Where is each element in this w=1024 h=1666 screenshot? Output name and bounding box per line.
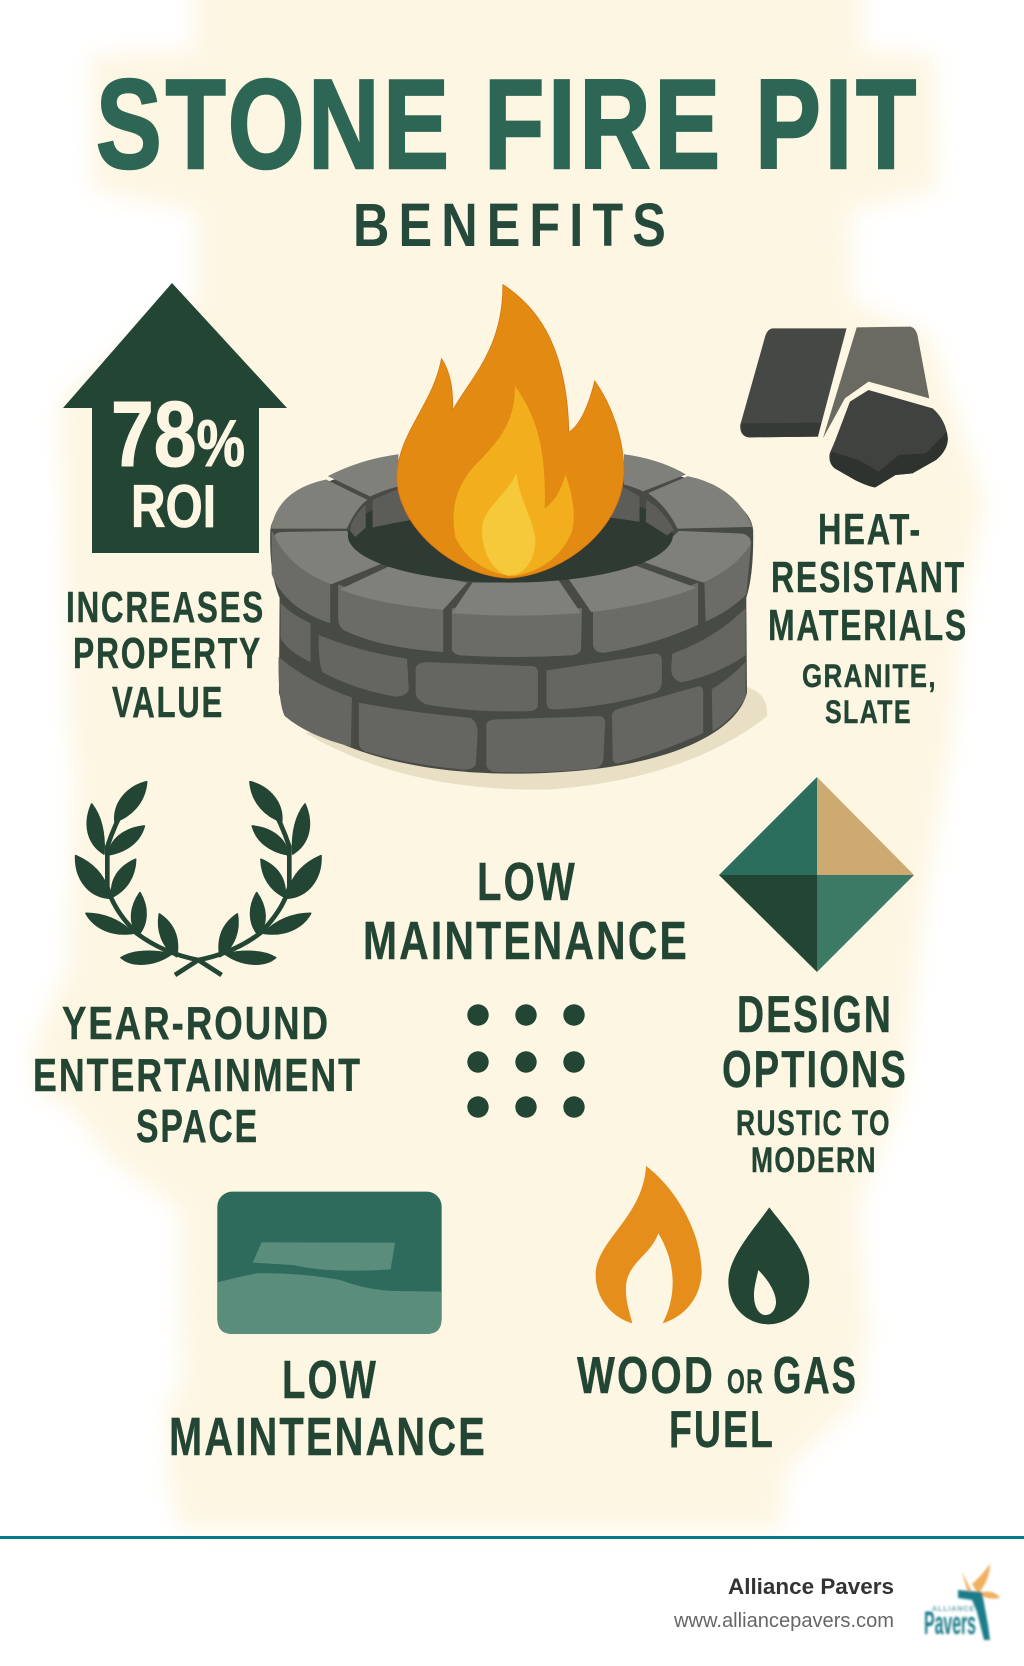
text: heat-resistant materials: HEAT- <box>818 505 922 554</box>
logo: Alliance Pavers: ALLIANCE <box>932 1606 974 1613</box>
subtitle: BENEFITS <box>353 191 675 259</box>
fire pit opening <box>348 488 673 583</box>
text: low maintenance (bottom) <box>169 1350 487 1467</box>
text: increases property value: PROPERTY <box>73 629 262 678</box>
flame: middle <box>454 386 574 576</box>
icon: stone slabs <box>740 327 948 487</box>
central fire pit illustration <box>270 285 767 790</box>
text: year-round entertainment space: ENTERTAINMENT <box>33 1049 362 1101</box>
text: wood or gas fuel: OR <box>727 1363 764 1401</box>
stone body mortar <box>270 454 753 774</box>
footer url: www.alliancepavers.com <box>673 1610 894 1632</box>
text: design options: DESIGN <box>737 986 893 1044</box>
text: wood or gas fuel <box>577 1347 858 1459</box>
flame: inner <box>482 473 535 576</box>
text: increases property value: INCREASES <box>66 583 265 632</box>
text: heat-resistant materials: GRANITE, <box>802 658 937 694</box>
text: design options <box>722 986 908 1180</box>
text: low maintenance (bottom): MAINTENANCE <box>169 1407 487 1467</box>
icon: smooth stone card <box>217 1192 442 1334</box>
text: design options: MODERN <box>751 1141 877 1180</box>
ROI percentage: 78% <box>111 382 245 486</box>
footer brand name: Alliance Pavers <box>728 1574 894 1599</box>
icon: laurel wreath <box>76 782 321 975</box>
text: low maintenance (middle) <box>363 852 689 971</box>
text: heat-resistant materials <box>768 505 968 730</box>
text: design options: RUSTIC TO <box>736 1104 891 1143</box>
ground shadow <box>305 676 767 790</box>
icon: design diamond <box>719 777 914 972</box>
icon: dot grid <box>467 1004 585 1118</box>
icon: gas drop <box>728 1207 809 1324</box>
rim side bricks <box>272 530 751 657</box>
text: year-round entertainment space: SPACE <box>136 1100 259 1152</box>
text: low maintenance (middle): LOW <box>477 852 577 912</box>
text: design options: OPTIONS <box>722 1041 908 1099</box>
footer divider <box>0 1536 1024 1539</box>
text: wood or gas fuel: GAS <box>773 1347 858 1405</box>
flame: outer <box>397 285 624 578</box>
middle and lower brick courses <box>279 603 746 772</box>
inner wall stones <box>350 481 674 537</box>
text: low maintenance (bottom): LOW <box>282 1350 378 1410</box>
text: increases property value <box>66 583 265 727</box>
text: wood or gas fuel: FUEL <box>669 1401 775 1459</box>
rim top bricks <box>271 454 752 616</box>
text: wood or gas fuel: WOOD <box>577 1347 715 1405</box>
text: heat-resistant materials: SLATE <box>825 694 912 730</box>
logo: Alliance Pavers <box>924 1564 1000 1641</box>
text: low maintenance (middle): MAINTENANCE <box>363 911 689 971</box>
icon: wood flame <box>596 1166 702 1323</box>
text: increases property value: VALUE <box>112 678 224 727</box>
icon: ROI arrow <box>63 283 287 553</box>
text: year-round entertainment space <box>33 997 362 1152</box>
ROI label: ROI <box>131 473 216 540</box>
text: year-round entertainment space: YEAR-ROUND <box>62 997 330 1049</box>
